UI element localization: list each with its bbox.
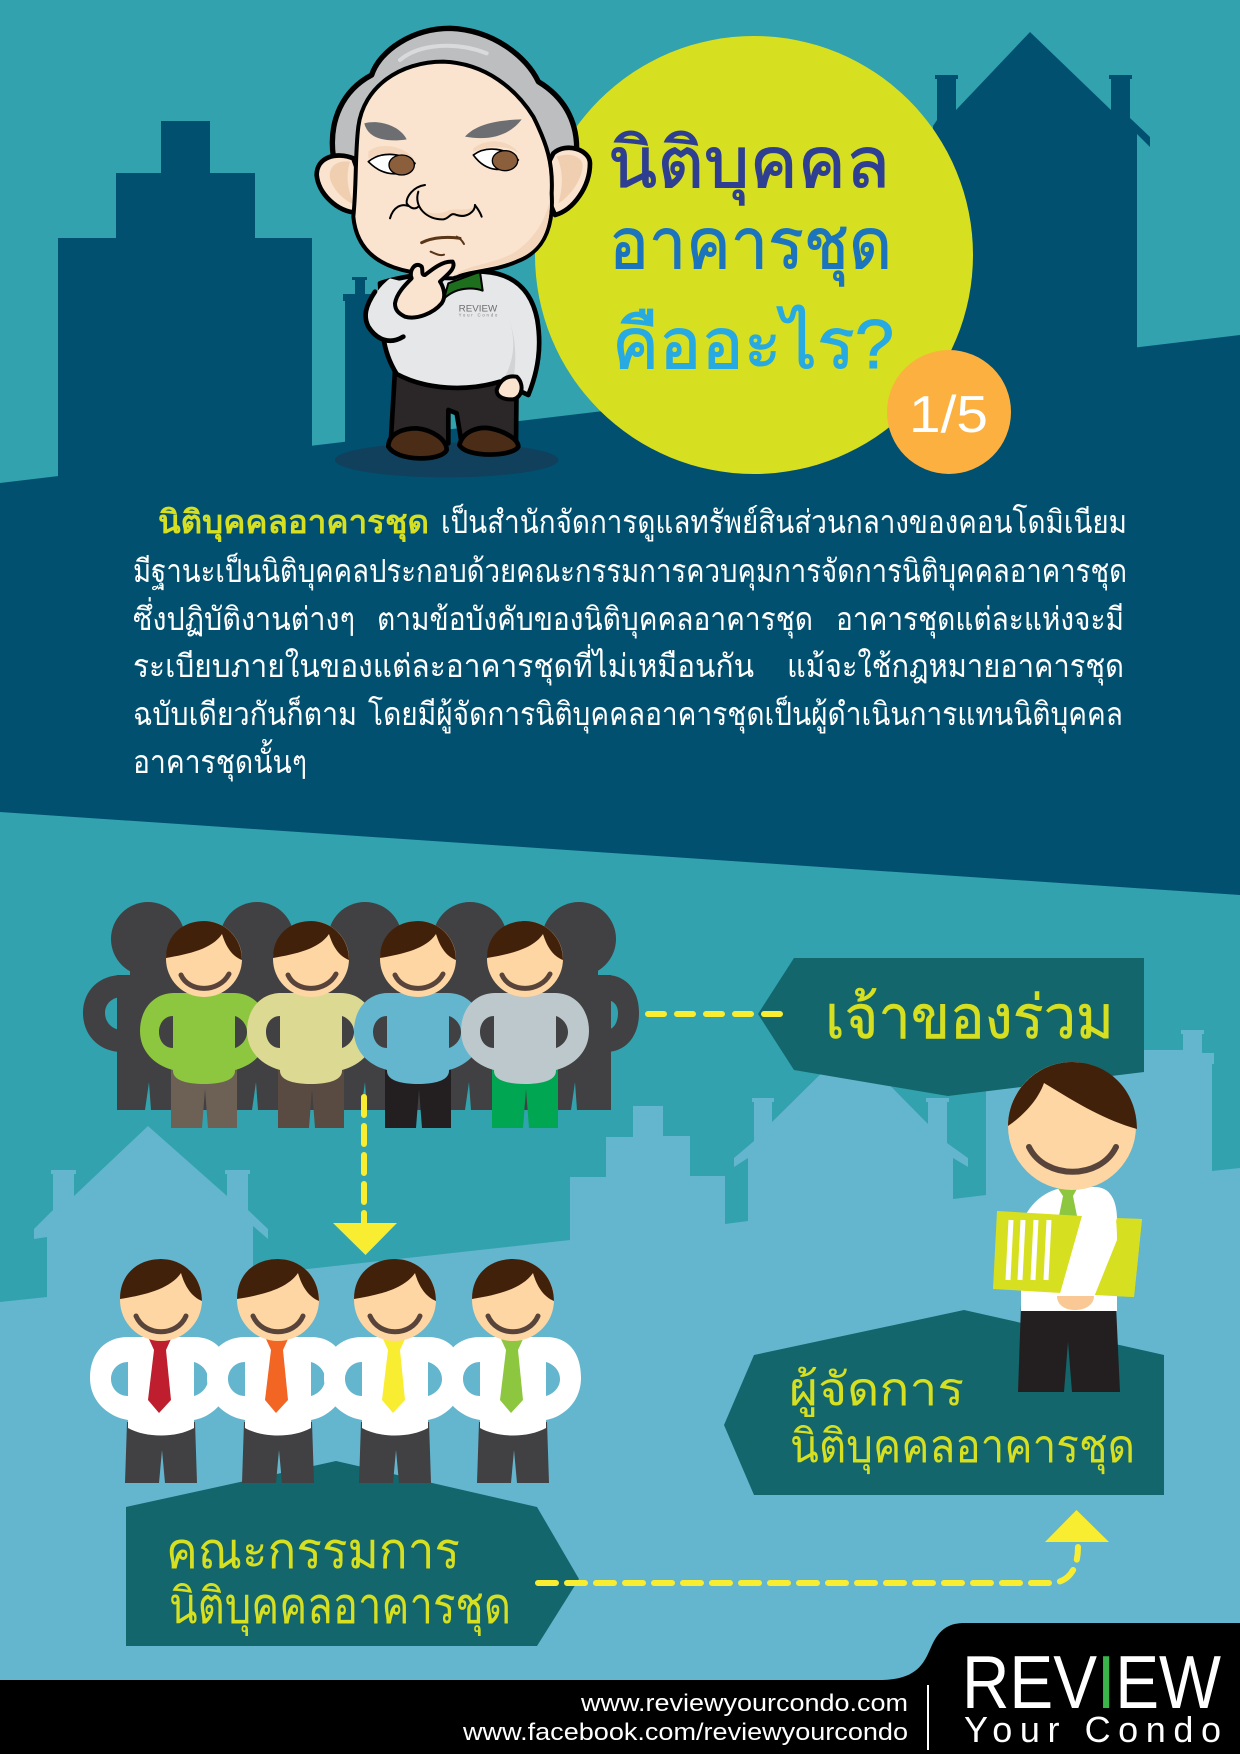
page badge: 1/5 xyxy=(909,386,988,444)
person: green sweater xyxy=(140,921,268,1128)
manager hand xyxy=(1057,1296,1094,1310)
main title circle xyxy=(535,36,973,474)
footer logo: Your Condo xyxy=(964,1709,1221,1750)
highlighted term: นิติบุคคลอาคารชุด xyxy=(158,504,429,543)
buildings: top left skyline xyxy=(58,121,400,480)
dashed arrow: committee to manager xyxy=(538,1510,1109,1583)
label: co-owners: เจ้าของร่วม xyxy=(825,984,1114,1051)
label: manager xyxy=(724,1310,1164,1495)
label: committee xyxy=(126,1461,579,1646)
mascot body xyxy=(380,271,539,395)
person: green tie xyxy=(442,1259,581,1483)
manager figure xyxy=(993,1062,1142,1392)
title line 1: นิติบุคคล xyxy=(608,124,890,206)
mascot nose and mouth xyxy=(390,185,482,255)
mascot shadow xyxy=(335,443,558,477)
dark silhouettes crowd xyxy=(83,902,639,1110)
description paragraph: ซึ่งปฏิบัติงานต่างๆ xyxy=(133,597,355,637)
mascot eyebrows xyxy=(364,119,522,140)
footer logo: REVIEW xyxy=(962,1640,1221,1724)
committee figures xyxy=(90,1259,581,1483)
person: cream sweater xyxy=(247,921,375,1128)
description paragraph: อาคารชุดนั้นๆ xyxy=(133,739,307,782)
mascot eyelid shading xyxy=(368,141,520,160)
co-owner figures xyxy=(140,921,589,1128)
manager shirt xyxy=(1021,1187,1117,1311)
manager trousers xyxy=(1018,1305,1120,1392)
person: yellow tie xyxy=(324,1259,463,1483)
person: red tie xyxy=(90,1259,229,1483)
mascot logo xyxy=(459,303,498,318)
mascot trousers xyxy=(391,370,517,443)
folder stripes xyxy=(1008,1220,1049,1280)
mascot shoes xyxy=(388,428,518,458)
person: blue sweater xyxy=(354,921,482,1128)
description paragraph: อาคารชุดแต่ละแห่งจะมี xyxy=(836,601,1124,639)
title line 2: อาคารชุด xyxy=(609,205,892,287)
manager folder front xyxy=(993,1211,1082,1293)
dashed arrow: owners down to committee xyxy=(333,1097,397,1255)
mascot hair xyxy=(332,28,577,187)
description paragraph: แม้จะใช้กฎหมายอาคารชุด xyxy=(787,648,1124,686)
manager tie xyxy=(1057,1187,1078,1216)
mascot: old man xyxy=(317,28,590,477)
description paragraph: ตามข้อบังคับของนิติบุคคลอาคารชุด xyxy=(377,601,813,639)
description paragraph xyxy=(133,503,1127,782)
mascot collar xyxy=(444,272,483,299)
description paragraph: เป็นสำนักจัดการดูแลทรัพย์สินส่วนกลางของคอนโดมิเนียม xyxy=(441,503,1127,542)
mascot ears xyxy=(317,148,590,215)
dashed arrow: co-owners to label xyxy=(648,1011,786,1017)
person: grey sweater xyxy=(461,921,589,1128)
description paragraph: ฉบับเดียวกันก็ตาม xyxy=(133,695,357,732)
footer links: www.reviewyourcondo.com xyxy=(580,1690,908,1717)
mascot logo: REVIEW xyxy=(459,303,498,313)
label: manager: ผู้จัดการ xyxy=(789,1363,964,1417)
footer bar xyxy=(0,1623,1240,1754)
description paragraph: ระเบียบภายในของแต่ละอาคารชุดที่ไม่เหมือนกัน xyxy=(133,644,754,686)
light blue lower skyline xyxy=(0,1030,1240,1754)
mascot arm xyxy=(366,278,427,341)
mascot face xyxy=(353,62,552,278)
title line 3: คืออะไร? xyxy=(612,305,894,383)
manager arm xyxy=(1059,1194,1117,1297)
label: committee: นิติบุคคลอาคารชุด xyxy=(169,1578,511,1636)
manager head xyxy=(1008,1062,1136,1190)
label: committee: คณะกรรมการ xyxy=(166,1523,460,1579)
mascot hand on hip xyxy=(497,376,522,399)
footer divider xyxy=(927,1685,929,1750)
page badge xyxy=(887,350,1011,474)
footer links: www.facebook.com/reviewyourcondo xyxy=(462,1719,908,1746)
label: manager: นิติบุคคลอาคารชุด xyxy=(790,1420,1135,1475)
person: orange tie xyxy=(207,1259,346,1483)
mascot logo: Your Condo xyxy=(459,313,498,318)
building: top right house xyxy=(933,32,1150,400)
label: co-owners xyxy=(758,958,1144,1096)
main title xyxy=(608,124,894,383)
mascot eyes xyxy=(368,149,518,175)
manager folder back piece in front of shirt xyxy=(1094,1218,1142,1297)
manager smile xyxy=(1029,1147,1116,1172)
manager hair xyxy=(1008,1062,1137,1129)
dark band xyxy=(0,335,1240,895)
manager folder back xyxy=(1090,1218,1142,1297)
footer links xyxy=(462,1690,908,1746)
description paragraph: โดยมีผู้จัดการนิติบุคคลอาคารชุดเป็นผู้ดำเนินการแทนนิติบุคคล xyxy=(368,695,1123,734)
mascot hand on chin xyxy=(395,262,454,318)
